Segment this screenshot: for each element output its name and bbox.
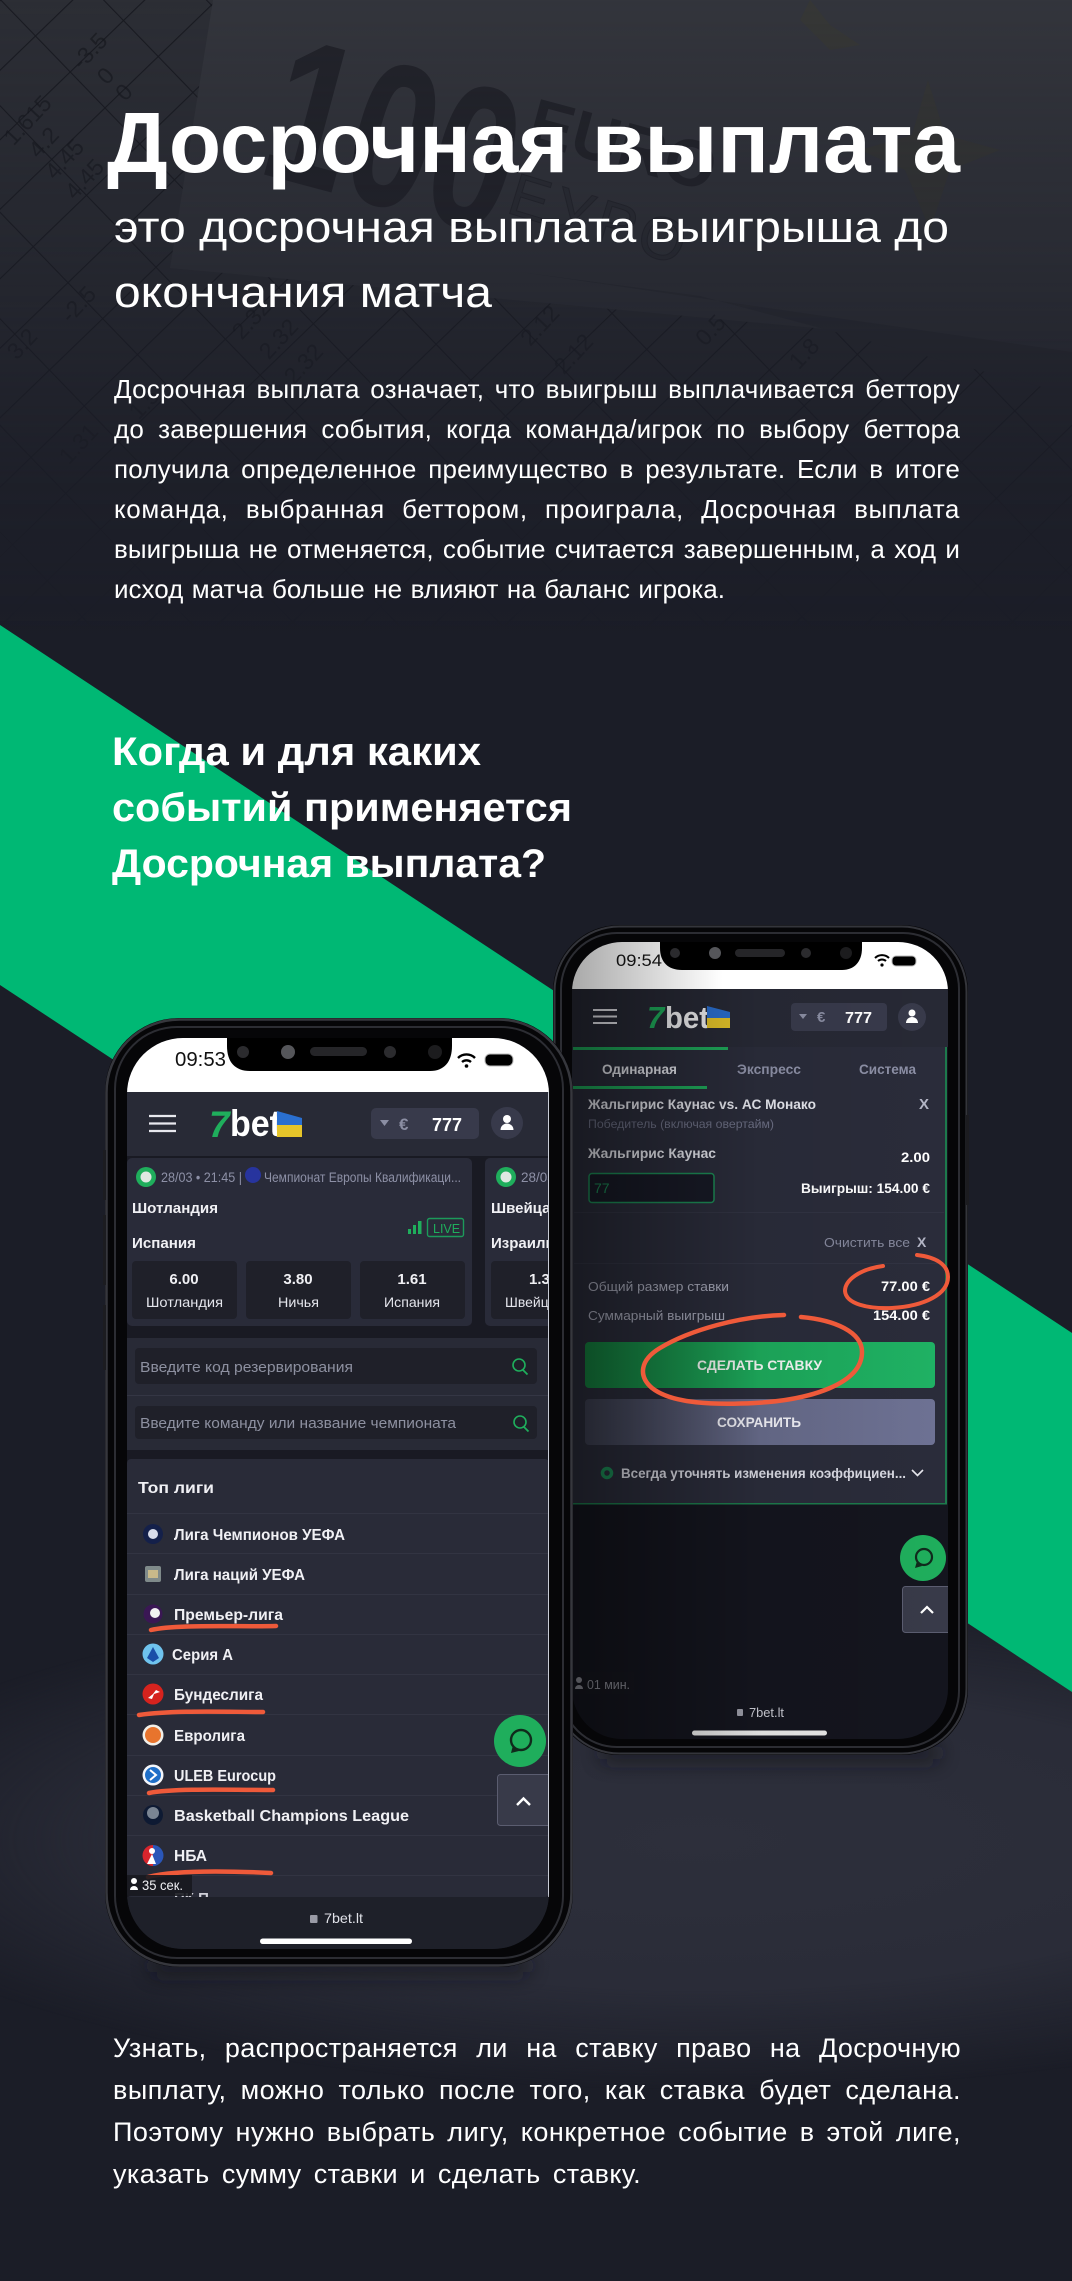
- phone 1 body: [103, 1018, 573, 1967]
- background photo: banknote and betting table: ЕУРО: [501, 160, 700, 279]
- phone 1 header: 7: [209, 1104, 232, 1145]
- phone 2 status bar: [572, 942, 948, 989]
- phone 1 header: bet: [230, 1103, 281, 1144]
- background photo: banknote and betting table: 4.45: [60, 154, 109, 204]
- intro paragraph: Досрочная выплата означает, что выигрыш выплачивается беттору: [114, 374, 960, 404]
- phone 2 header: 7: [647, 1000, 666, 1035]
- background photo: banknote and betting table: 2.32: [254, 313, 303, 364]
- match card: second, clipped: [485, 1158, 548, 1326]
- background photo: banknote and betting table: [0, 0, 1072, 640]
- phone 2 chat and scroll buttons: [900, 1535, 952, 1632]
- phone 2 bet slip panel: 77.00 €: [881, 1278, 930, 1294]
- button: place bet: СДЕЛАТЬ СТАВКУ: [697, 1357, 822, 1373]
- phone 2 bet slip panel: Экспресс: [737, 1061, 801, 1077]
- background photo: banknote and betting table: 1.5: [124, 383, 164, 424]
- background photo: banknote and betting table: 0: [110, 78, 138, 105]
- phone shadows: [150, 1745, 940, 1974]
- background photo: banknote and betting table: 2.12: [549, 328, 598, 379]
- closing paragraph: [113, 2033, 961, 2189]
- league icons: [142, 1524, 164, 1866]
- phone 2 header: €: [817, 1009, 826, 1026]
- search panel: Введите код резервирования: [140, 1360, 353, 1376]
- match card: Scotland vs Spain: Испания: [132, 1235, 196, 1252]
- red circle: place bet button: [643, 1315, 862, 1404]
- intro paragraph: выигрыша не отменяется, событие считается завершенным, а ход и: [114, 534, 960, 564]
- phone 1 status bar: [127, 1038, 549, 1092]
- background photo: banknote and betting table: 2.12: [515, 300, 564, 350]
- match card: Scotland vs Spain: [127, 1158, 472, 1326]
- phone 2 bet slip panel: 154.00 €: [873, 1307, 930, 1323]
- red underlines: [139, 1626, 276, 1877]
- phone 1 timer: ПК П: [174, 1890, 209, 1907]
- odds boxes: Шотландия: [146, 1294, 223, 1310]
- odds boxes: Ничья: [278, 1294, 319, 1310]
- league names: Премьер-лига: [174, 1607, 283, 1624]
- phone 2 body: [553, 925, 969, 1755]
- odds change option: Всегда уточнять изменения коэффициен...: [621, 1466, 906, 1481]
- phone 1 timer: [127, 1875, 208, 1897]
- league names: Серия А: [172, 1647, 233, 1664]
- search panel: [127, 1338, 549, 1450]
- top leagues list: Топ лиги: [138, 1480, 214, 1497]
- search panel: Введите команду или название чемпионата: [140, 1416, 457, 1432]
- background photo: banknote and betting table: -3.5: [66, 27, 113, 74]
- background photo: banknote and betting table: 4.2: [23, 122, 64, 163]
- background photo: banknote and betting table: EURO: [521, 84, 725, 205]
- league names: ULEB Eurocup: [174, 1768, 276, 1785]
- odds boxes: 1.61: [397, 1271, 427, 1288]
- phone 2 bet slip panel: X: [919, 1096, 929, 1113]
- match card: second, clipped: Швейцария: [505, 1294, 580, 1310]
- odds boxes: 6.00: [169, 1271, 199, 1288]
- section heading: событий применяется: [112, 786, 572, 830]
- phone 2 status bar: 09:54: [616, 951, 662, 970]
- lower background glow: [0, 1500, 1072, 2100]
- background photo: banknote and betting table: 1.615: [0, 90, 57, 150]
- subtitle: [114, 203, 949, 317]
- phone 2 bet slip panel: Победитель (включая овертайм): [588, 1117, 774, 1131]
- background photo: banknote and betting table: -2.5: [55, 281, 101, 328]
- closing paragraph: Поэтому нужно выбрать лигу, конкретное событие в этой лиге,: [113, 2117, 961, 2147]
- phone 2 bet slip panel: Жальгирис Каунас vs. АС Монако: [587, 1096, 816, 1112]
- phone 1 timer: 35 сек.: [142, 1877, 183, 1893]
- section heading: Когда и для каких: [112, 730, 481, 774]
- background photo: banknote and betting table: 2.32: [226, 294, 276, 344]
- phone 2 bet slip panel: Одинарная: [602, 1061, 677, 1077]
- match card: second, clipped: Израиль: [491, 1235, 555, 1252]
- phone 2 footer: 01 мин.: [587, 1678, 630, 1692]
- league names: Евролига: [174, 1728, 245, 1745]
- phone 1 chat and scroll buttons: [494, 1715, 548, 1826]
- phone 2 bet slip panel: 2.00: [901, 1149, 930, 1165]
- league names: НБА: [174, 1848, 207, 1865]
- phone 1 header: 777: [432, 1115, 462, 1135]
- match card: second, clipped: 1.35: [529, 1271, 558, 1288]
- intro paragraph: до завершения события, когда команда/игрок по выбору беттора: [114, 414, 960, 444]
- league names: Лига Чемпионов УЕФА: [174, 1527, 345, 1544]
- button: save: [585, 1399, 935, 1445]
- subtitle: это досрочная выплата выигрыша до: [114, 203, 949, 252]
- phone 2 bet slip panel: Система: [859, 1061, 916, 1077]
- phone 2 header: bet: [665, 1000, 709, 1035]
- intro paragraph: получила определенное преимущество в результате. Если в итоге: [114, 454, 960, 484]
- match card: Scotland vs Spain: Шотландия: [132, 1200, 218, 1217]
- match card: Scotland vs Spain: LIVE: [433, 1222, 460, 1236]
- closing paragraph: Узнать, распространяется ли на ставку право на Досрочную: [113, 2033, 961, 2063]
- phone 1: home screen: [103, 1018, 580, 1967]
- match card: second, clipped: 28/03: [521, 1170, 555, 1185]
- title: Досрочная выплата: [107, 96, 961, 191]
- phone 2 bet slip panel: [572, 1047, 947, 1504]
- background photo: banknote and betting table: 1.8: [784, 333, 824, 374]
- intro paragraph: команда, выбранная беттором, проиграла, Досрочная выплата: [114, 494, 960, 524]
- league names: Бундеслига: [174, 1687, 263, 1704]
- background photo: banknote and betting table: 0.5: [690, 309, 731, 350]
- red circle: stake amount: [845, 1255, 948, 1308]
- phone 2 bet slip panel: X: [917, 1234, 927, 1250]
- phone 1 header: [127, 1092, 549, 1156]
- intro paragraph: исход матча больше не влияют на баланс игрока.: [114, 574, 725, 604]
- background photo: banknote and betting table: 0: [91, 62, 119, 89]
- intro paragraph: [114, 374, 960, 604]
- phone 2: bet slip: [553, 925, 969, 1755]
- match card: second, clipped: Швейцария: [491, 1200, 578, 1217]
- button: save: СОХРАНИТЬ: [717, 1414, 801, 1430]
- button: place bet: [585, 1342, 935, 1388]
- league names: Basketball Champions League: [174, 1808, 409, 1825]
- match card: Scotland vs Spain: 28/03 • 21:45 |: [161, 1170, 242, 1185]
- phone 2 bet slip panel: Суммарный выигрыш: [588, 1308, 725, 1323]
- phone 2 footer: 7bet.lt: [749, 1706, 785, 1720]
- background photo: banknote and betting table: 2.32: [279, 338, 328, 389]
- top leagues list: [127, 1459, 549, 1897]
- section heading: [112, 730, 572, 886]
- closing paragraph: выплату, можно только после того, как ставка будет сделана.: [113, 2075, 961, 2105]
- phone 1 header: €: [399, 1115, 409, 1134]
- subtitle: окончания матча: [114, 268, 493, 317]
- odds boxes: 3.80: [283, 1271, 313, 1288]
- phone 2 footer: [572, 1672, 827, 1736]
- match card: Scotland vs Spain: Чемпионат Европы Квалификаци...: [264, 1170, 461, 1185]
- phone 1 footer: 7bet.lt: [324, 1910, 363, 1926]
- background photo: banknote and betting table: 100: [244, 0, 544, 279]
- league names: Лига наций УЕФА: [174, 1567, 305, 1584]
- phone 1 status bar: 09:53: [175, 1049, 226, 1071]
- phone 2 header: [572, 989, 948, 1047]
- phone 2 bet slip panel: Выигрыш: 154.00 €: [801, 1180, 930, 1196]
- background photo: banknote and betting table: 1.31: [54, 418, 103, 469]
- background photo: banknote and betting table: 4.45: [40, 134, 89, 184]
- phone 2 bet slip panel: 77: [594, 1180, 610, 1196]
- phone 1 footer: [127, 1897, 549, 1949]
- phone 2 header: 777: [845, 1010, 872, 1027]
- background photo: banknote and betting table: 3.2: [1, 323, 42, 364]
- phone 2 bet slip panel: Общий размер ставки: [588, 1279, 729, 1294]
- section heading: Досрочная выплата?: [112, 842, 546, 886]
- closing paragraph: указать сумму ставки и сделать ставку.: [113, 2159, 641, 2189]
- odds boxes: Испания: [384, 1294, 440, 1310]
- league names: [172, 1527, 409, 1865]
- phone 2 bet slip panel: Очистить все: [824, 1235, 910, 1250]
- odds boxes: [132, 1261, 465, 1319]
- green diagonal band: [0, 625, 1072, 1692]
- phone 2 bet slip panel: Жальгирис Каунас: [587, 1145, 716, 1161]
